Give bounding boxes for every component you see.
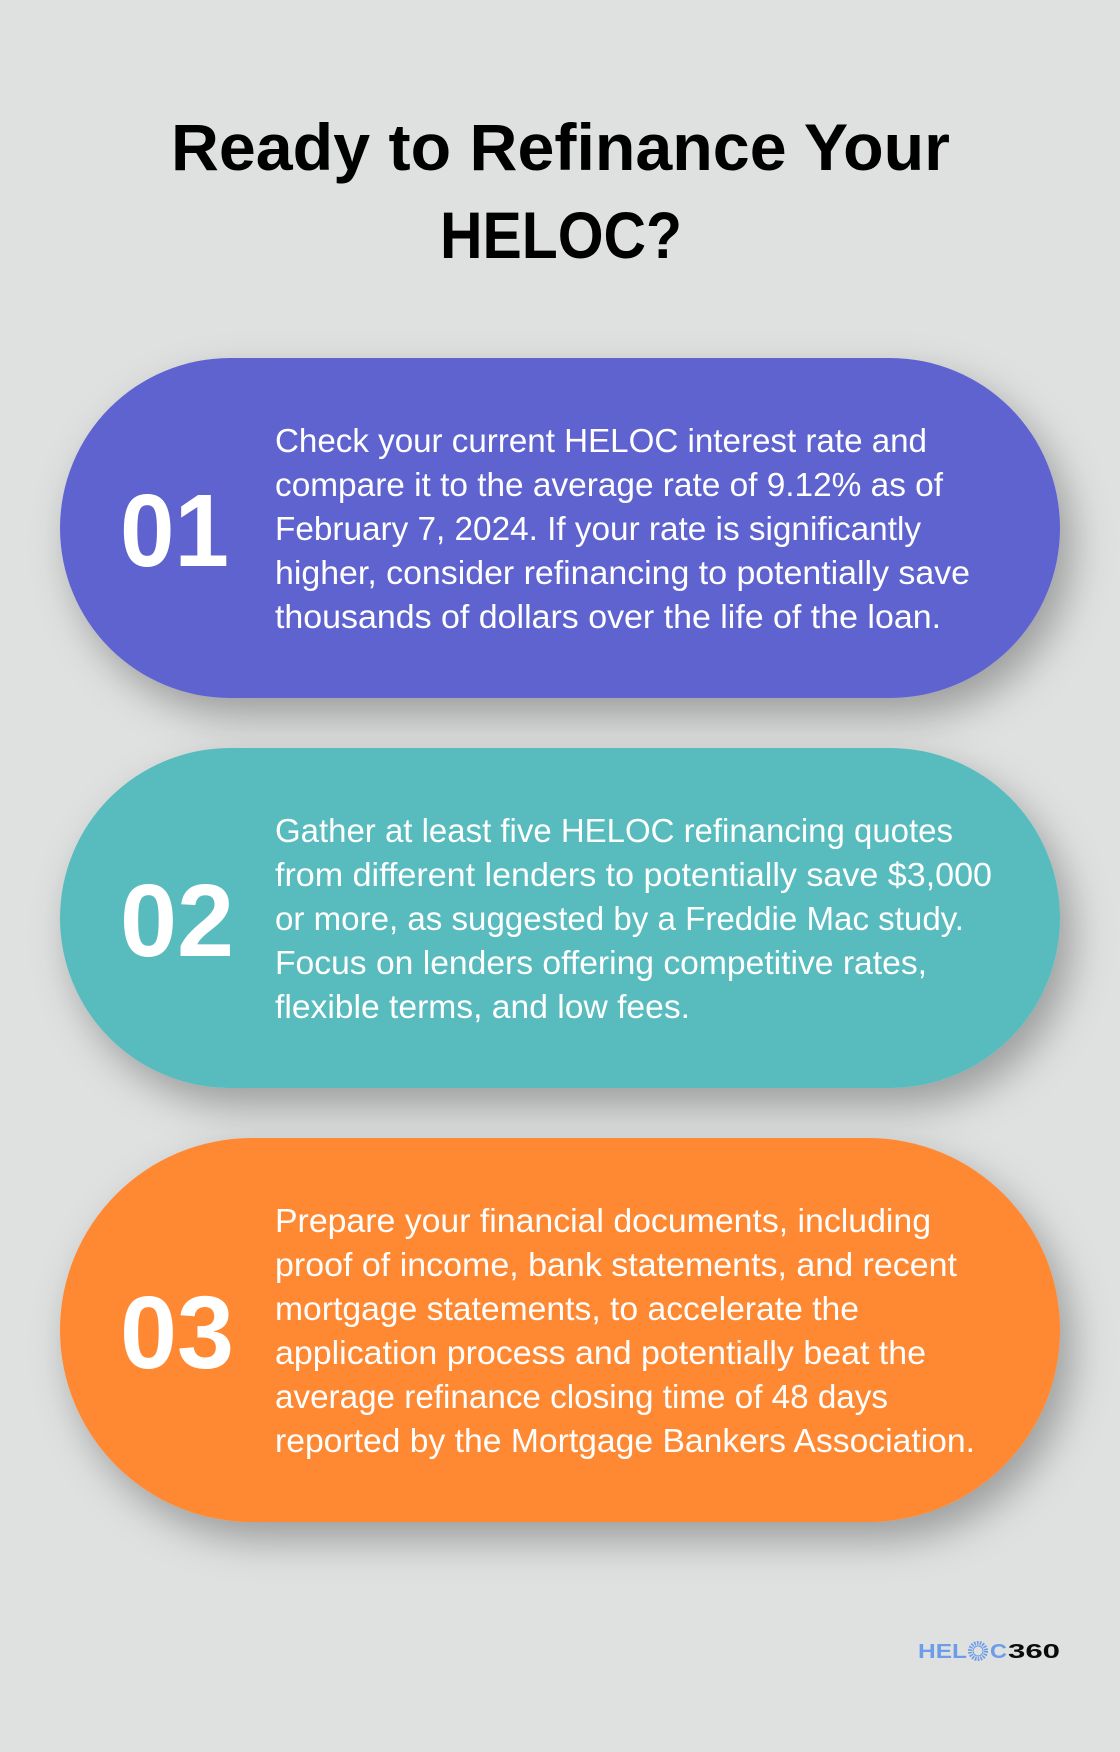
panel: step 01 [60,358,1060,698]
step 02 text block: from different lenders to potentially save $3,000 [275,856,992,893]
step number 03: 03 [120,1275,234,1390]
step 02 text block: flexible terms, and low fees. [275,988,690,1025]
logo: HELOC360: HEL [918,1641,967,1663]
step 01 text block: February 7, 2024. If your rate is significantly [275,510,921,547]
step 01 text block: higher, consider refinancing to potentially save [275,554,970,591]
title: HELOC? [440,198,682,272]
logo: HELOC360: C [990,1641,1007,1663]
step 03 text block: Prepare your financial documents, including [275,1202,931,1239]
step number 02: 02 [120,863,234,978]
title: Ready to Refinance Your [171,110,950,184]
step 01 text block: compare it to the average rate of 9.12% as of [275,466,944,503]
step 02 text block [275,812,992,1025]
card background: teal pill [60,748,1060,1088]
panel: step 02 [60,748,1060,1088]
step 03 text block: average refinance closing time of 48 days [275,1378,888,1415]
step 03 text block: application process and potentially beat the [275,1334,926,1371]
step 03 text block: proof of income, bank statements, and recent [275,1246,957,1283]
step 01 text block: thousands of dollars over the life of the loan. [275,598,941,635]
step 01 text block: Check your current HELOC interest rate and [275,422,927,459]
step 02 text block: Focus on lenders offering competitive rates, [275,944,927,981]
logo: HELOC360: 360 [1008,1641,1060,1663]
step 01 text block [275,422,970,635]
step 03 text block: mortgage statements, to accelerate the [275,1290,859,1327]
step 03 text block [275,1202,975,1459]
step 02 text block: Gather at least five HELOC refinancing quotes [275,812,953,849]
card background: orange pill [60,1138,1060,1522]
card background: purple pill [60,358,1060,698]
panel: step 03 [60,1138,1060,1522]
logo: HELOC360 [918,1641,1060,1663]
icon: swirl O [970,1643,986,1659]
step number 01: 01 [120,473,229,588]
title [171,110,950,272]
step 02 text block: or more, as suggested by a Freddie Mac study. [275,900,964,937]
step 03 text block: reported by the Mortgage Bankers Association. [275,1422,975,1459]
